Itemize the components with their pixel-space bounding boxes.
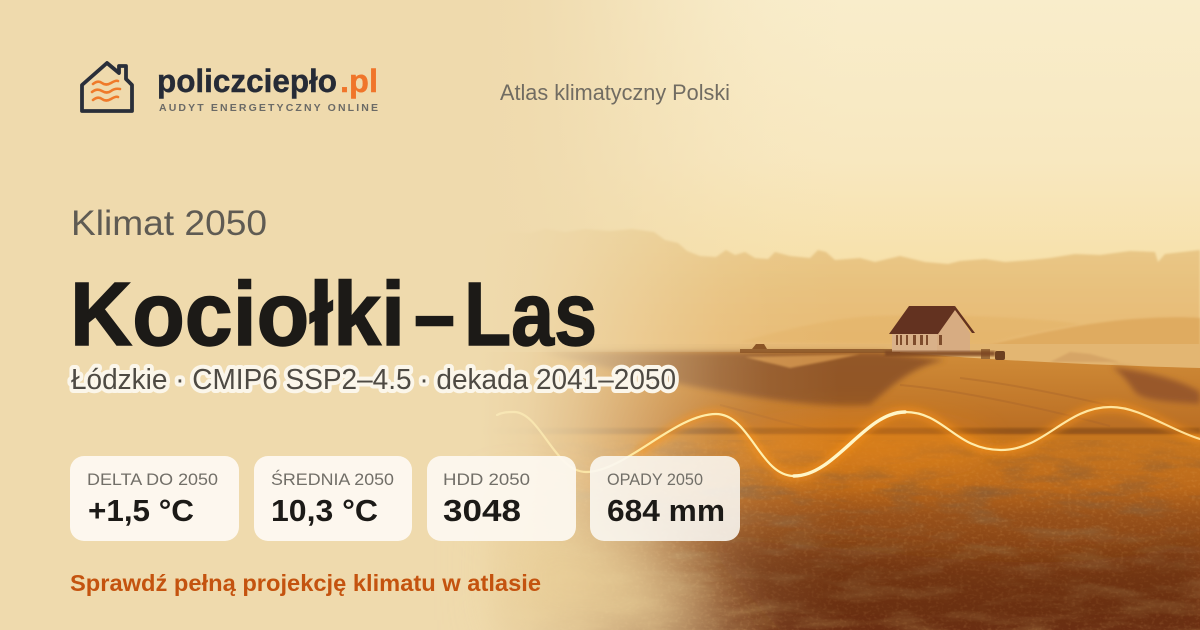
atlas label: Atlas klimatyczny Polski	[500, 80, 730, 105]
bottom cream fade	[500, 500, 730, 630]
stat card: HDD	[427, 456, 576, 541]
orange glow	[730, 415, 990, 475]
stat card: delta	[70, 456, 239, 541]
stat card: average	[254, 456, 412, 541]
lit wedge on hill	[745, 354, 860, 368]
subtitle: Łódzkie · CMIP6 SSP2–4.5 · dekada 2041–2050	[71, 364, 676, 396]
brand name: policzciepło	[157, 63, 337, 99]
orange wash on mid field	[0, 436, 1200, 496]
icon: house with heat waves	[82, 63, 132, 111]
wheat field	[0, 432, 1200, 630]
field ridge lines	[720, 378, 1160, 430]
stat card: average: ŚREDNIA 2050	[271, 470, 394, 489]
ground strip left of house	[740, 349, 900, 353]
far field band	[480, 344, 1200, 368]
logo	[82, 63, 378, 114]
wheat texture	[0, 440, 1200, 630]
right hill shadow	[1112, 367, 1200, 404]
stat card: delta: DELTA DO 2050	[87, 470, 218, 489]
stat card: rainfall: 684 mm	[607, 493, 725, 528]
stat card: average: 10,3 °C	[271, 493, 378, 528]
kicker: Klimat 2050	[71, 204, 267, 243]
brand domain: .pl	[340, 63, 378, 99]
glowing temperature wave	[497, 407, 1200, 476]
title: –	[414, 265, 455, 365]
title	[70, 265, 597, 365]
foreground shadows	[700, 540, 1200, 630]
title: Las	[464, 265, 597, 365]
hill shadow	[540, 352, 945, 406]
house on the hill	[752, 306, 1005, 360]
brand tagline: AUDYT ENERGETYCZNY ONLINE	[159, 102, 378, 114]
call to action: Sprawdź pełną projekcję klimatu w atlasie	[70, 570, 541, 596]
stat card: rainfall: OPADY 2050	[607, 470, 703, 489]
stat card: delta: +1,5 °C	[88, 493, 194, 528]
distant tree line	[470, 229, 1200, 360]
stat card: HDD: HDD 2050	[443, 470, 530, 489]
stat card: rainfall	[590, 456, 740, 541]
rolling hills	[0, 352, 1200, 434]
title: Kociołki	[70, 265, 405, 365]
stat card: HDD: 3048	[443, 493, 521, 528]
misty hills	[740, 315, 1080, 345]
